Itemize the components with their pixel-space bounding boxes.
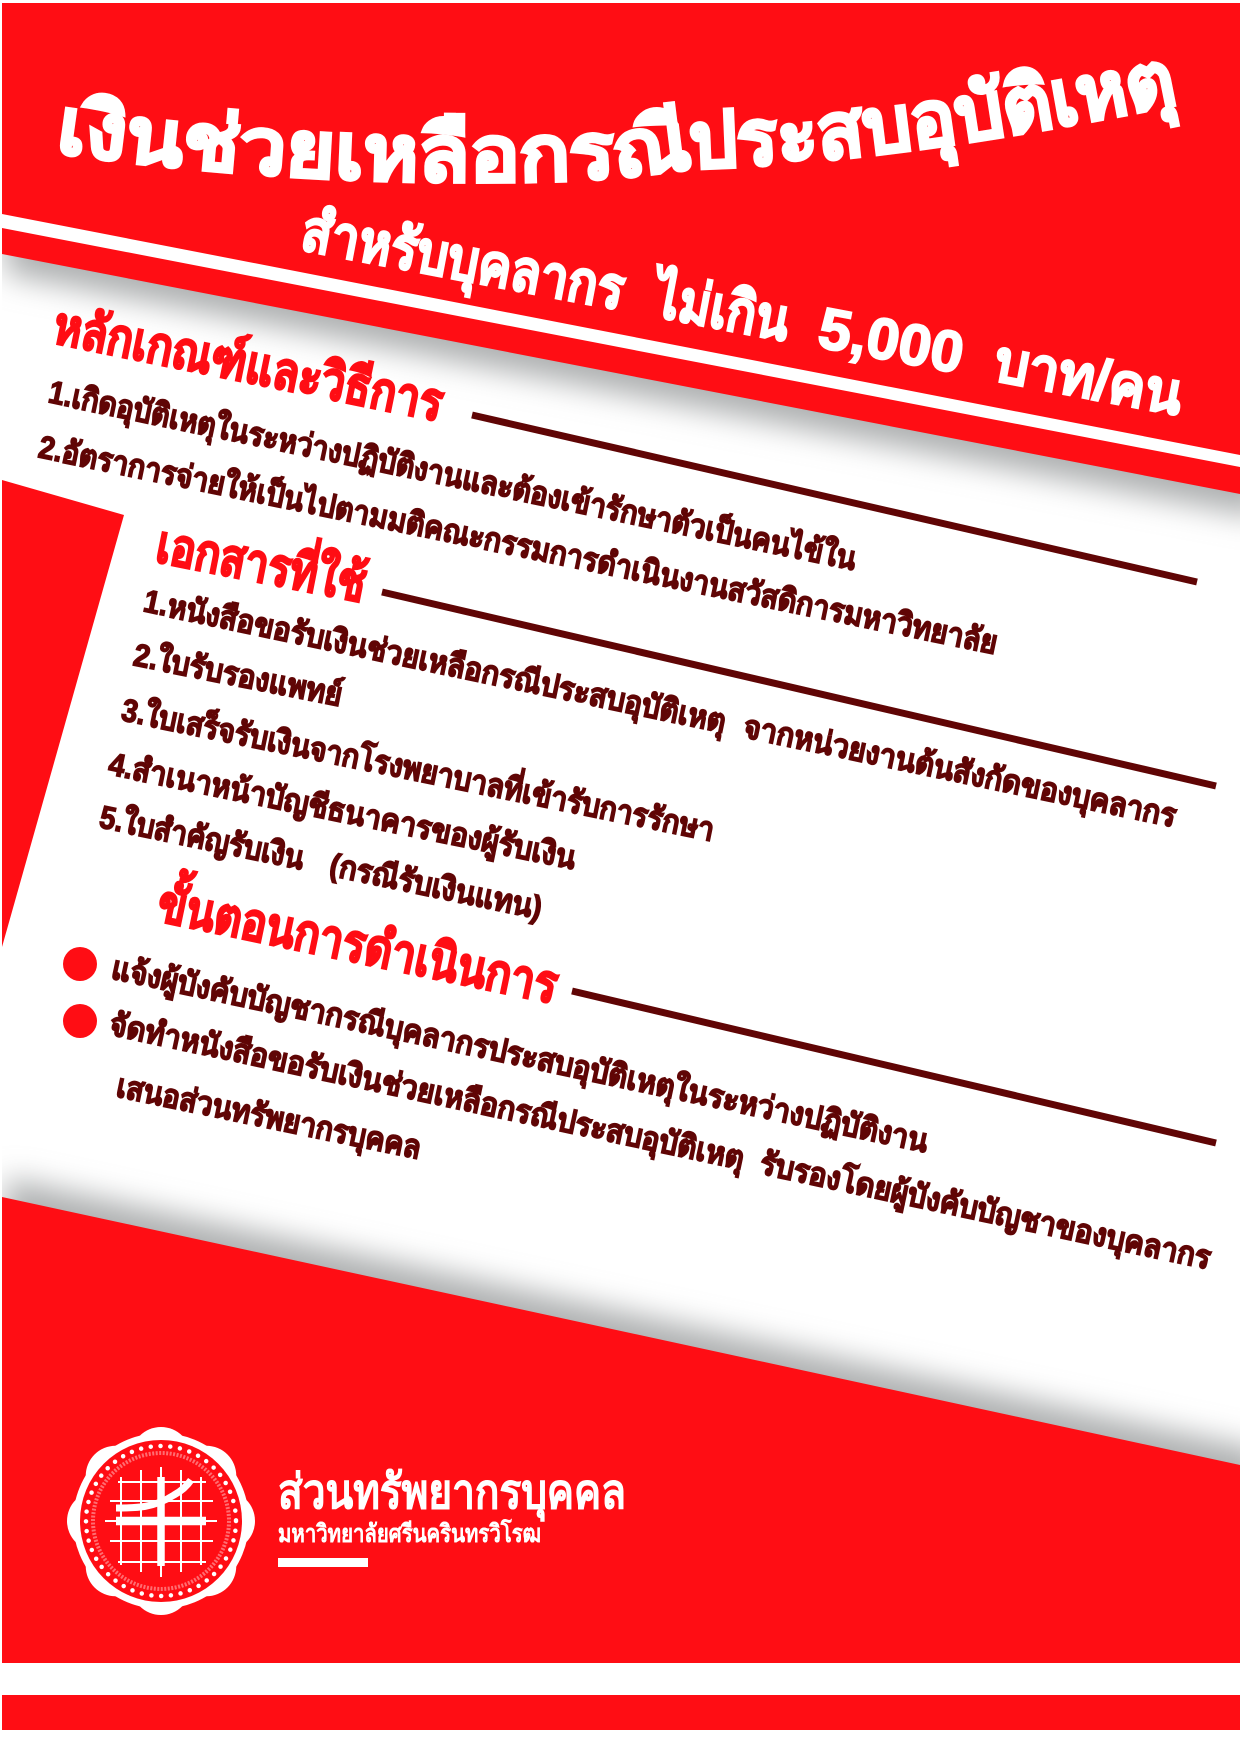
procedure step 2: จัดทำหนังสือขอรับเงินช่วยเหลือกรณีประสบอุบัติเหตุ xyxy=(106,1006,748,1179)
bullet 2 xyxy=(63,1004,97,1038)
subtitle: บาท/คน xyxy=(989,329,1188,428)
university name: มหาวิทยาลัยศรีนครินทรวิโรฒ xyxy=(278,1518,541,1548)
criteria item 2: 2.อัตราการจ่ายให้เป็นไปตามมติคณะกรรมการดำเนินงานสวัสดิการมหาวิทยาลัย xyxy=(36,427,1001,661)
procedure step 1: แจ้งผู้บังคับบัญชากรณีบุคลากรประสบอุบัติเหตุในระหว่างปฏิบัติงาน xyxy=(108,949,932,1162)
procedure step 2 continued: เสนอส่วนทรัพยากรบุคคล xyxy=(113,1068,424,1169)
heading: criteria: หลักเกณฑ์และวิธีการ xyxy=(49,296,448,433)
heading rule xyxy=(572,991,1216,1143)
heading: documents: เอกสารที่ใช้ xyxy=(152,508,372,614)
bottom red panel xyxy=(2,1197,1240,1663)
subtitle: ไม่เกิน xyxy=(644,263,796,354)
shadow above bottom panel xyxy=(2,1165,1240,1465)
shadow under top banner xyxy=(2,254,1240,532)
title xyxy=(60,61,1180,184)
bullet 1 xyxy=(63,947,97,981)
section: documents xyxy=(96,508,1216,927)
title: เงินช่วยเหลือกรณี xyxy=(60,92,692,184)
document item 2: 2.ใบรับรองแพทย์ xyxy=(131,636,346,713)
university seal xyxy=(67,1427,255,1615)
procedure step 2 xyxy=(106,1005,1214,1279)
document item 5: (กรณีรับเงินแทน) xyxy=(327,847,545,926)
document item 1 xyxy=(140,583,1180,837)
white underline xyxy=(278,1558,368,1567)
white diagonal stripe xyxy=(2,214,1240,467)
section: procedure xyxy=(63,865,1216,1279)
subtitle: 5,000 xyxy=(813,295,969,386)
document item 1: จากหน่วยงานต้นสังกัดของบุคลากร xyxy=(740,708,1180,837)
document item 3: 3.ใบเสร็จรับเงินจากโรงพยาบาลที่เข้ารับการรักษา xyxy=(119,687,719,848)
left red wedge xyxy=(2,480,124,947)
heading: procedure: ขั้นตอนการดำเนินการ xyxy=(153,865,565,1015)
heading rule xyxy=(472,415,1197,582)
document item 5: 5.ใบสำคัญรับเงิน xyxy=(96,798,308,877)
section: criteria xyxy=(36,296,1197,661)
document item 5 xyxy=(96,798,546,927)
document item 1: 1.หนังสือขอรับเงินช่วยเหลือกรณีประสบอุบัติเหตุ xyxy=(140,583,729,742)
heading rule xyxy=(382,592,1216,786)
criteria item 1: 1.เกิดอุบัติเหตุในระหว่างปฏิบัติงานและต้องเข้ารักษาตัวเป็นคนไข้ใน xyxy=(45,372,860,580)
department name: ส่วนทรัพยากรบุคคล xyxy=(278,1466,626,1522)
bottom red bar xyxy=(2,1695,1240,1730)
title: ประสบอุบัติเหตุ xyxy=(690,61,1180,170)
top red banner xyxy=(2,3,1240,494)
subtitle: สำหรับบุคลากร xyxy=(296,198,630,326)
document item 4: 4.สำเนาหน้าบัญชีธนาคารของผู้รับเงิน xyxy=(105,746,579,879)
subtitle xyxy=(296,197,1189,432)
